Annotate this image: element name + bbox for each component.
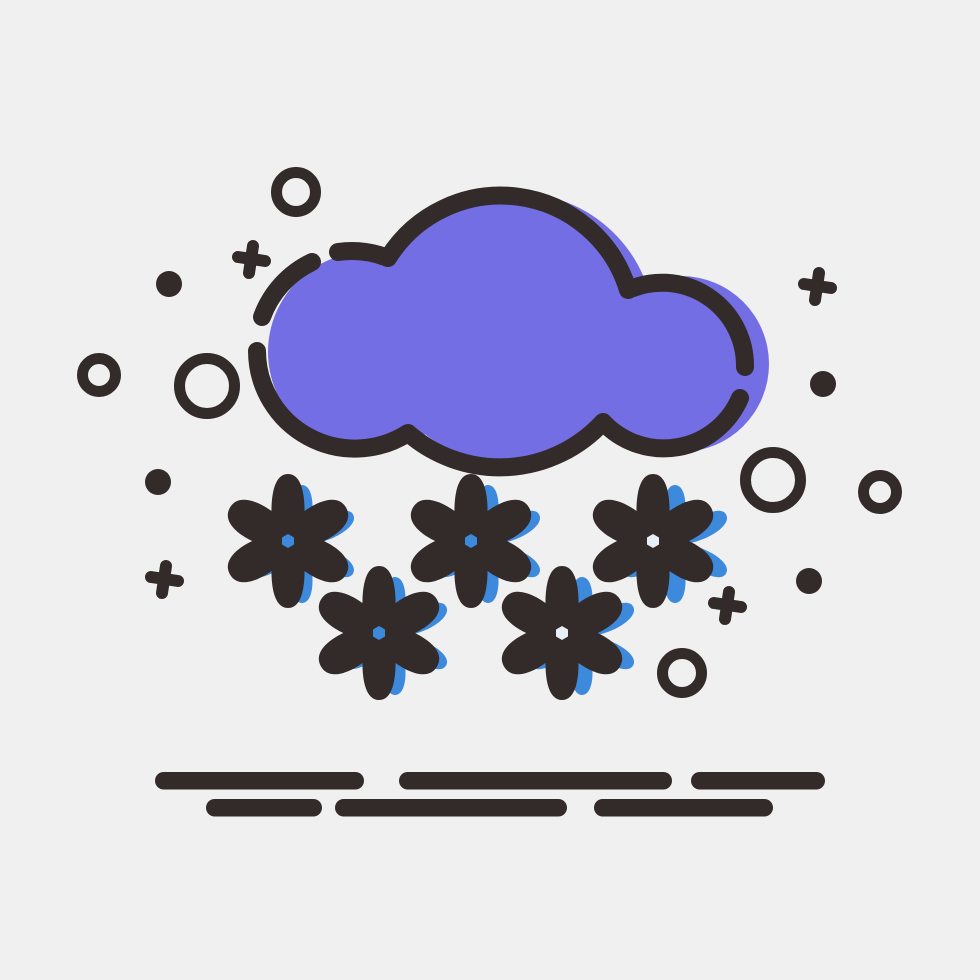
cloud fill (268, 192, 769, 464)
ground lines (155, 772, 825, 816)
rings (82, 172, 896, 692)
dots (145, 271, 836, 594)
plus signs (151, 246, 831, 619)
cloud outline (257, 196, 745, 467)
snowflake shadows (246, 485, 731, 695)
snowflakes (221, 474, 720, 700)
snowflake centres (282, 534, 659, 640)
